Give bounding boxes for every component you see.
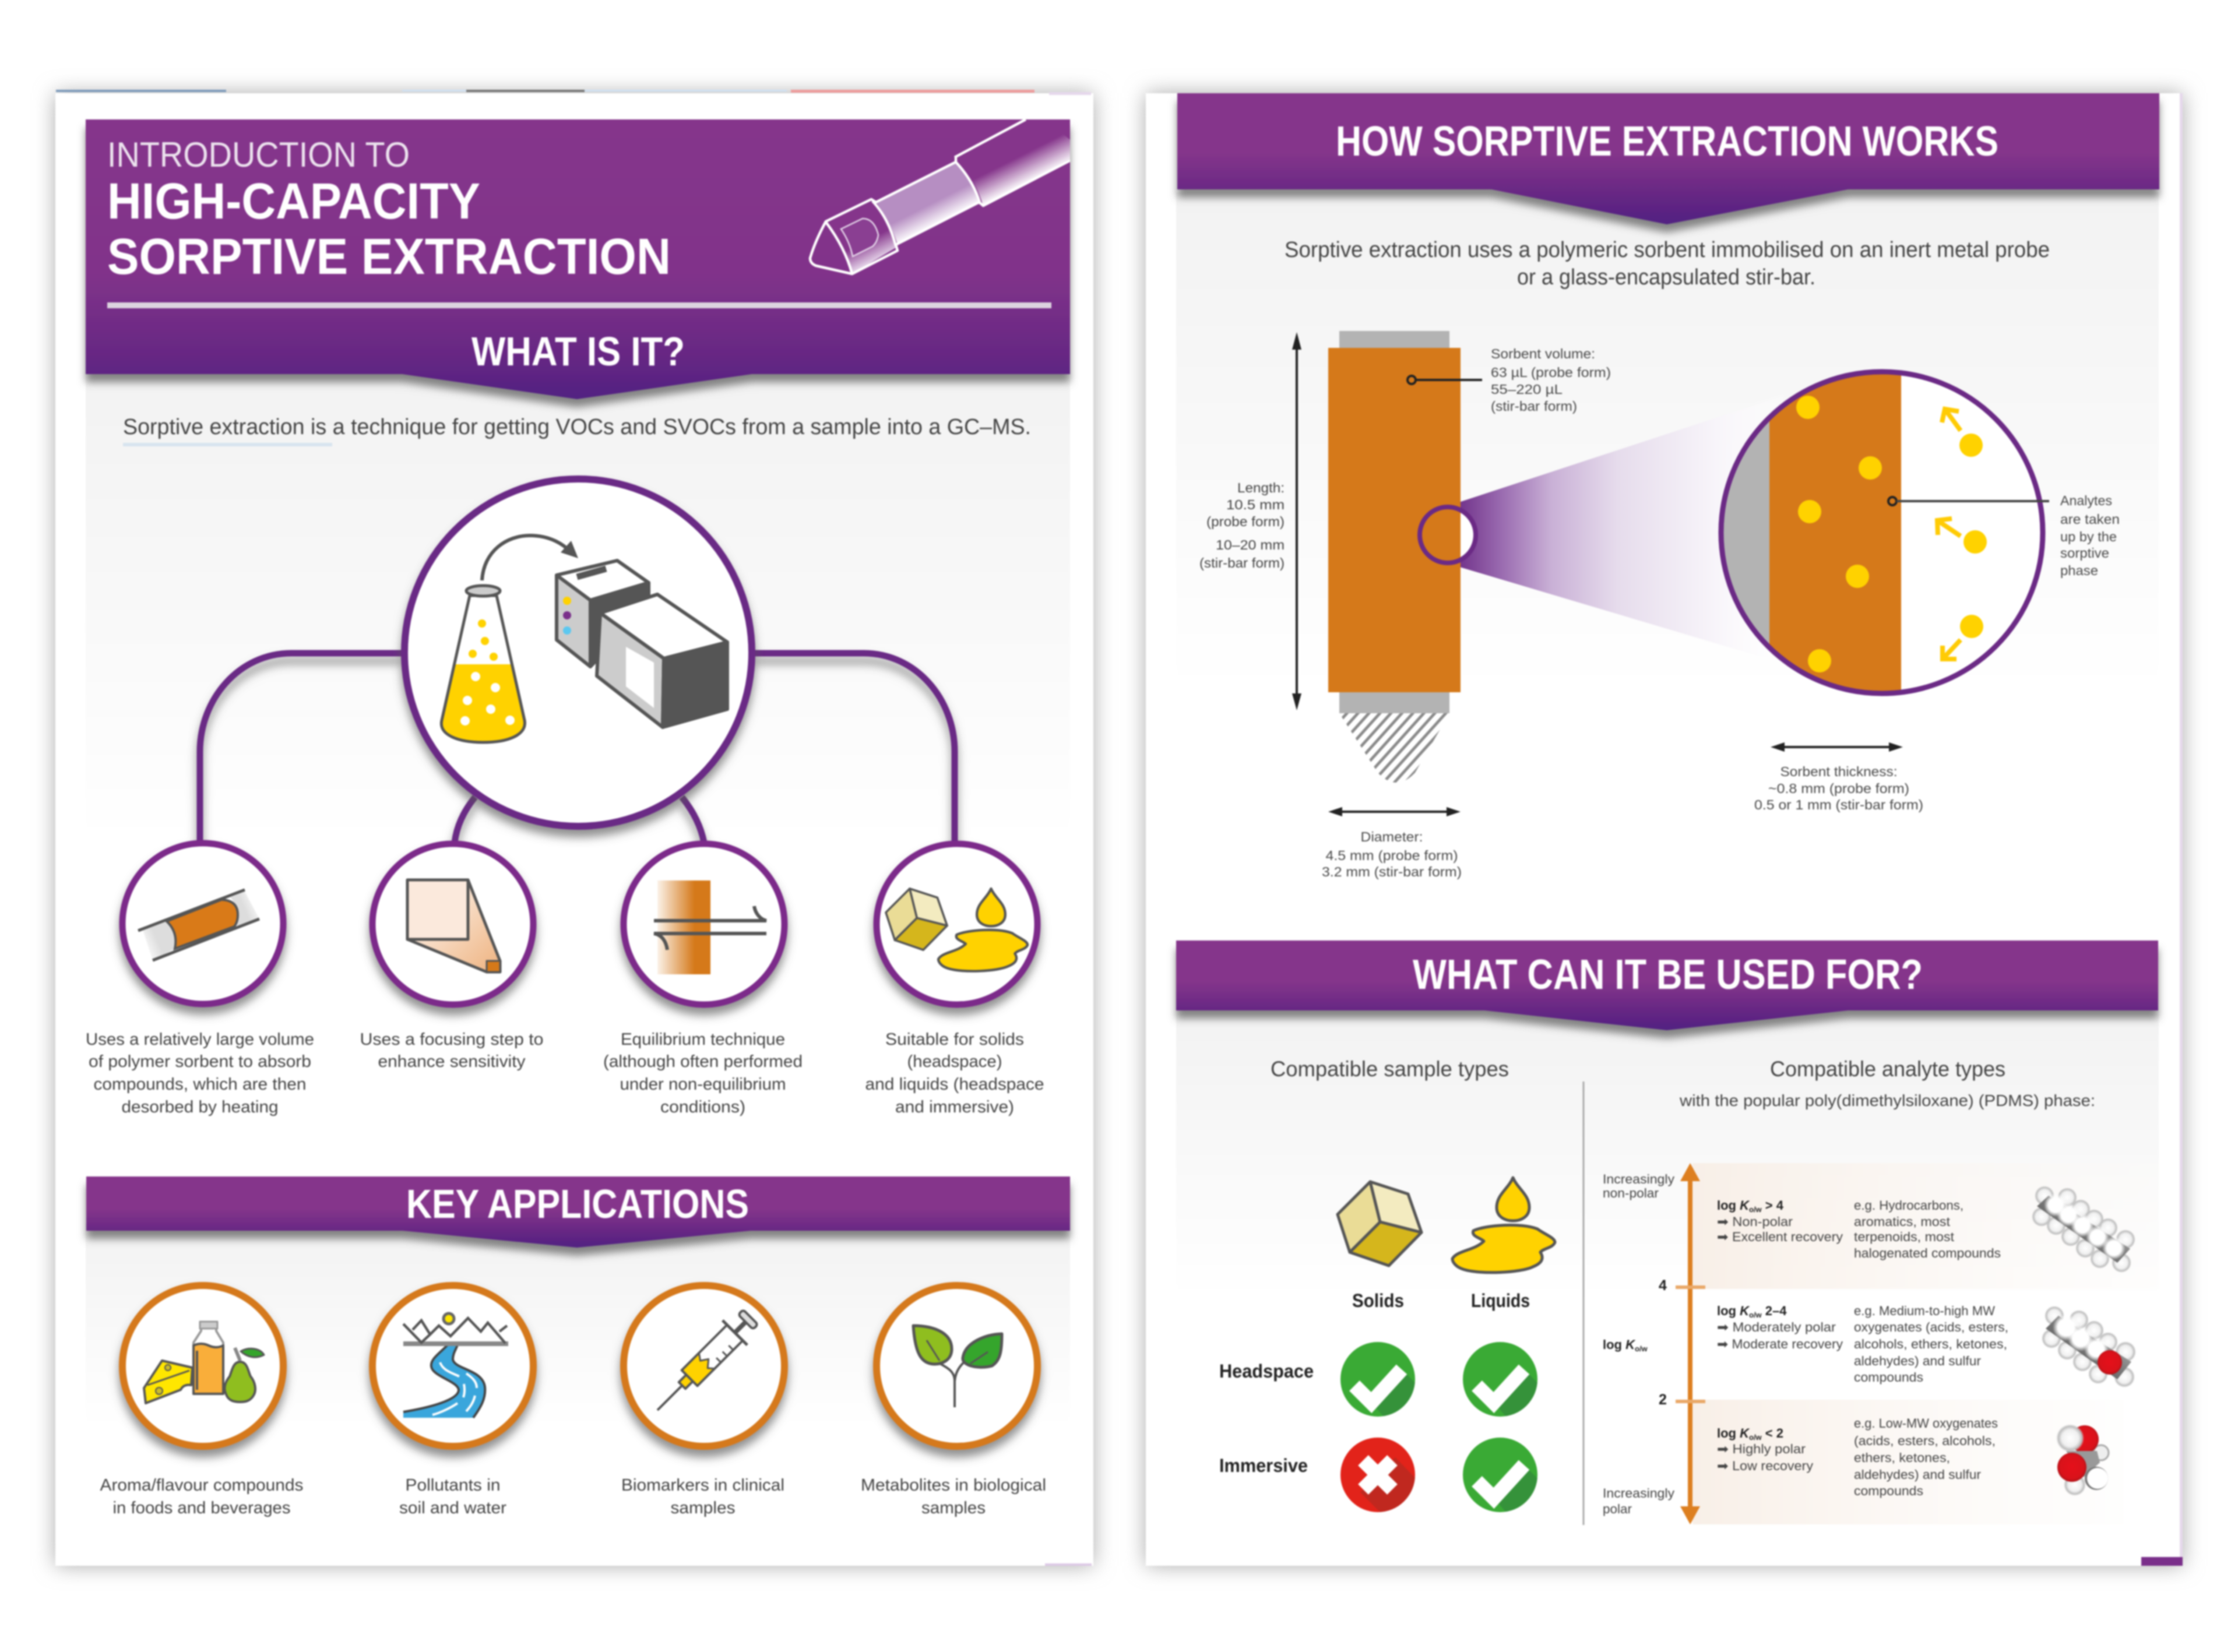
caption: desorbed by heating bbox=[121, 1098, 279, 1116]
row: non-polar: e.g. Hydrocarbons, bbox=[1854, 1198, 1963, 1213]
row: highly polar: ➡ Highly polar bbox=[1717, 1442, 1806, 1456]
icon: solids cube bbox=[1338, 1182, 1421, 1266]
caption: Uses a relatively large volume bbox=[86, 1030, 314, 1049]
heading: what can it be used for: WHAT CAN IT BE USED FOR? bbox=[1413, 952, 1923, 998]
icon: liquids drop and puddle bbox=[1452, 1178, 1555, 1273]
label: sorbent volume: (stir-bar form) bbox=[1491, 399, 1577, 414]
axis labels: Increasingly bbox=[1603, 1172, 1674, 1186]
row: moderately polar: alcohols, ethers, ketones, bbox=[1854, 1337, 2007, 1351]
analyte arrows bbox=[1937, 409, 1961, 659]
label: sorbent volume: 55–220 µL bbox=[1491, 382, 1563, 397]
panel: central circle, flask to GC-MS bbox=[404, 479, 752, 826]
heading: how sorptive extraction works bbox=[1177, 93, 2159, 224]
molecule: alcohol bbox=[2042, 1306, 2136, 1387]
icon: focusing square bbox=[407, 880, 500, 972]
caption bbox=[865, 1030, 1044, 1116]
axis labels: o/w bbox=[1635, 1344, 1648, 1353]
dimension: sorbent thickness arrow bbox=[1771, 742, 1903, 752]
label: sorbent thickness: Sorbent thickness: bbox=[1780, 764, 1898, 779]
caption: conditions) bbox=[660, 1098, 745, 1116]
label: length: 10–20 mm bbox=[1216, 537, 1285, 552]
caption: Aroma/flavour compounds bbox=[100, 1476, 303, 1495]
row: non-polar: terpenoids, most bbox=[1854, 1230, 1954, 1244]
magnifier ring bbox=[1420, 507, 1476, 563]
row: moderately polar: ➡ Moderately polar bbox=[1717, 1320, 1836, 1334]
caption: Metabolites in biological bbox=[861, 1476, 1046, 1495]
table: sample compatibility: Headspace bbox=[1219, 1361, 1314, 1382]
row: highly polar: o/w bbox=[1749, 1433, 1762, 1442]
caption: samples bbox=[921, 1499, 986, 1517]
icon: cross, solids immersive bbox=[1340, 1438, 1442, 1539]
heading: compatible analyte types bbox=[1679, 1057, 2095, 1109]
diagram: magnification cone bbox=[1452, 396, 1783, 660]
caption: Uses a focusing step to bbox=[360, 1030, 543, 1049]
row: highly polar: log K bbox=[1717, 1426, 1749, 1440]
label: analytes taken up bbox=[2060, 493, 2120, 578]
icon: probe tip bbox=[810, 112, 1084, 274]
text: sorptive extraction definition: Sorptive extraction is a technique for getting VOCs and SVOCs from a sample into a GC–MS. bbox=[123, 415, 1031, 439]
row: highly polar: ➡ Low recovery bbox=[1717, 1459, 1813, 1473]
text: how sorptive extraction intro: Sorptive extraction uses a polymeric sorbent immobilised on an inert metal probe bbox=[1285, 238, 2050, 262]
panel: left page bbox=[55, 90, 1093, 1566]
caption: of polymer sorbent to absorb bbox=[89, 1052, 311, 1071]
heading: compatible analyte types: Compatible analyte types bbox=[1770, 1057, 2005, 1081]
scale arrow bbox=[1680, 1163, 1700, 1524]
icon: cheese, bottle and pear bbox=[144, 1322, 264, 1403]
feature: solids and liquids bbox=[865, 844, 1044, 1116]
label: length: (stir-bar form) bbox=[1199, 555, 1285, 570]
caption: in foods and beverages bbox=[113, 1499, 290, 1517]
feature: focusing step bbox=[360, 844, 543, 1071]
label: sorbent volume: Sorbent volume: bbox=[1491, 346, 1595, 361]
application: biomarkers bbox=[621, 1285, 784, 1517]
row: moderately polar: oxygenates (acids, esters, bbox=[1854, 1320, 2008, 1334]
label: length bbox=[1199, 480, 1285, 570]
caption: enhance sensitivity bbox=[378, 1052, 526, 1071]
chart: log Kow polarity scale bbox=[1603, 1163, 2159, 1524]
heading: compatible sample types: Compatible sample types bbox=[1271, 1057, 1509, 1081]
row: moderately polar: o/w bbox=[1749, 1311, 1762, 1319]
caption: Equilibrium technique bbox=[621, 1030, 785, 1049]
caption: and liquids (headspace bbox=[865, 1075, 1044, 1094]
table: sample compatibility: Solids bbox=[1352, 1290, 1404, 1311]
row: moderately polar: log K bbox=[1717, 1304, 1749, 1318]
dimension: length arrow bbox=[1292, 332, 1301, 710]
dimension: diameter arrow bbox=[1328, 807, 1461, 816]
caption bbox=[100, 1476, 303, 1517]
diagram: sorbent probe bbox=[1328, 331, 1482, 792]
icon: river and mountains bbox=[403, 1313, 508, 1418]
label: length: Length: bbox=[1237, 480, 1285, 495]
icon: liquid drop and puddle bbox=[938, 889, 1027, 971]
feature: equilibrium technique bbox=[603, 844, 803, 1116]
label: diameter bbox=[1322, 829, 1462, 879]
caption: (although often performed bbox=[603, 1052, 803, 1071]
axis labels: 2 bbox=[1659, 1392, 1667, 1408]
text: how sorptive extraction intro bbox=[1285, 238, 2050, 290]
row: non-polar: log K bbox=[1717, 1198, 1749, 1213]
row: non-polar bbox=[1717, 1198, 2001, 1260]
icon: solid cube bbox=[886, 889, 947, 950]
diagram: magnified sorbent circle bbox=[1719, 367, 2049, 699]
pointer: sorbent volume bbox=[1407, 376, 1482, 384]
application: metabolites bbox=[861, 1285, 1046, 1517]
label: analytes taken up: Analytes bbox=[2060, 493, 2112, 508]
caption bbox=[399, 1476, 506, 1517]
row: non-polar: ➡ Excellent recovery bbox=[1717, 1230, 1843, 1244]
label: sorbent thickness: ~0.8 mm (probe form) bbox=[1768, 781, 1909, 796]
caption: Pollutants in bbox=[406, 1476, 500, 1495]
row: non-polar: > 4 bbox=[1762, 1198, 1784, 1213]
connectors: purple tree lines bbox=[200, 653, 955, 843]
row: moderately polar: 2–4 bbox=[1762, 1304, 1787, 1318]
icon: plant leaves bbox=[913, 1326, 1002, 1407]
caption: compounds, which are then bbox=[93, 1075, 307, 1094]
row: non-polar: o/w bbox=[1749, 1205, 1762, 1214]
label: analytes taken up: up by the bbox=[2060, 529, 2117, 544]
label: sorbent volume: 63 µL (probe form) bbox=[1491, 365, 1611, 380]
title: introduction to: INTRODUCTION TO bbox=[107, 135, 410, 174]
row: moderately polar: ➡ Moderate recovery bbox=[1717, 1337, 1843, 1351]
icon: tick, liquids headspace bbox=[1463, 1342, 1564, 1443]
row: highly polar: aldehydes) and sulfur bbox=[1854, 1467, 1981, 1482]
label: length: 10.5 mm bbox=[1226, 497, 1285, 512]
icon: syringe bbox=[645, 1305, 763, 1422]
table: sample compatibility bbox=[1219, 1290, 1564, 1539]
row: non-polar: aromatics, most bbox=[1854, 1214, 1950, 1229]
axis labels bbox=[1603, 1172, 1674, 1516]
table: sample compatibility: Immersive bbox=[1219, 1455, 1308, 1476]
axis labels: Increasingly bbox=[1603, 1486, 1674, 1500]
heading: what can it be used for bbox=[1176, 941, 2158, 1030]
caption: soil and water bbox=[399, 1499, 506, 1517]
label: diameter: Diameter: bbox=[1360, 829, 1423, 844]
label: analytes taken up: sorptive bbox=[2060, 545, 2109, 561]
row: non-polar: ➡ Non-polar bbox=[1717, 1214, 1793, 1229]
application: aroma and flavour bbox=[100, 1285, 303, 1517]
label: length: (probe form) bbox=[1206, 514, 1285, 529]
title: high-capacity sorptive extraction: HIGH-CAPACITY bbox=[107, 173, 480, 230]
icon: coated tube bbox=[138, 890, 259, 960]
caption bbox=[861, 1476, 1046, 1517]
caption: under non-equilibrium bbox=[620, 1075, 786, 1094]
heading: key applications: KEY APPLICATIONS bbox=[406, 1181, 749, 1227]
row: moderately polar bbox=[1717, 1304, 2008, 1385]
row: non-polar: halogenated compounds bbox=[1854, 1246, 2001, 1260]
icon: equilibrium arrows bbox=[654, 880, 766, 974]
caption bbox=[86, 1030, 314, 1116]
caption: Biomarkers in clinical bbox=[621, 1476, 784, 1495]
row: highly polar: (acids, esters, alcohols, bbox=[1854, 1433, 1996, 1448]
title: high-capacity sorptive extraction: SORPTIVE EXTRACTION bbox=[107, 228, 671, 285]
row: highly polar: < 2 bbox=[1762, 1426, 1783, 1440]
molecule: hydrocarbon bbox=[2032, 1186, 2135, 1273]
row: moderately polar: aldehydes) and sulfur bbox=[1854, 1354, 1981, 1368]
icon: curved arrow bbox=[482, 536, 578, 580]
heading: key applications bbox=[86, 1177, 1070, 1248]
caption bbox=[360, 1030, 543, 1071]
icon: GC-MS instrument bbox=[557, 561, 727, 727]
row: highly polar: e.g. Low-MW oxygenates bbox=[1854, 1416, 1998, 1431]
label: sorbent volume bbox=[1491, 346, 1611, 414]
table: sample compatibility: Liquids bbox=[1471, 1290, 1530, 1311]
heading: how sorptive extraction works: HOW SORPTIVE EXTRACTION WORKS bbox=[1336, 118, 1998, 165]
axis labels: non-polar bbox=[1603, 1186, 1659, 1200]
label: diameter: 3.2 mm (stir-bar form) bbox=[1322, 864, 1462, 879]
axis labels: polar bbox=[1603, 1502, 1632, 1516]
axis labels: 4 bbox=[1659, 1277, 1667, 1294]
application: pollutants bbox=[372, 1285, 533, 1517]
icon: conical flask bbox=[441, 586, 525, 742]
label: sorbent thickness: 0.5 or 1 mm (stir-bar form) bbox=[1754, 797, 1923, 812]
caption: Suitable for solids bbox=[885, 1030, 1024, 1049]
row: highly polar bbox=[1717, 1416, 1998, 1498]
feature: large sorbent volume bbox=[86, 843, 314, 1116]
panel: right page bbox=[1146, 93, 2183, 1566]
axis labels: log K bbox=[1603, 1337, 1635, 1352]
label: sorbent thickness bbox=[1754, 764, 1923, 812]
row: moderately polar: compounds bbox=[1854, 1370, 1923, 1385]
label: analytes taken up: phase bbox=[2060, 563, 2098, 578]
label: diameter: 4.5 mm (probe form) bbox=[1325, 848, 1458, 863]
row: moderately polar: e.g. Medium-to-high MW bbox=[1854, 1304, 1995, 1318]
icon: tick, solids headspace bbox=[1340, 1342, 1442, 1443]
analyte dots bbox=[1796, 396, 1987, 672]
molecule: small oxygenate bbox=[2056, 1424, 2109, 1496]
label: analytes taken up: are taken bbox=[2060, 512, 2120, 527]
caption: and immersive) bbox=[895, 1098, 1014, 1116]
row: highly polar: compounds bbox=[1854, 1484, 1923, 1498]
text: how sorptive extraction intro: or a glass-encapsulated stir-bar. bbox=[1517, 265, 1815, 290]
heading: compatible analyte types: with the popular poly(dimethylsiloxane) (PDMS) phase: bbox=[1679, 1091, 2095, 1109]
heading: what is it: WHAT IS IT? bbox=[471, 329, 685, 374]
caption: samples bbox=[670, 1499, 736, 1517]
caption: (headspace) bbox=[907, 1052, 1002, 1071]
pointer: analytes bbox=[1888, 497, 2049, 505]
caption bbox=[621, 1476, 784, 1517]
header: introduction banner bbox=[86, 112, 1084, 399]
caption bbox=[603, 1030, 803, 1116]
icon: tick, liquids immersive bbox=[1463, 1438, 1564, 1539]
title: high-capacity sorptive extraction bbox=[107, 173, 671, 285]
row: highly polar: ethers, ketones, bbox=[1854, 1450, 1950, 1465]
